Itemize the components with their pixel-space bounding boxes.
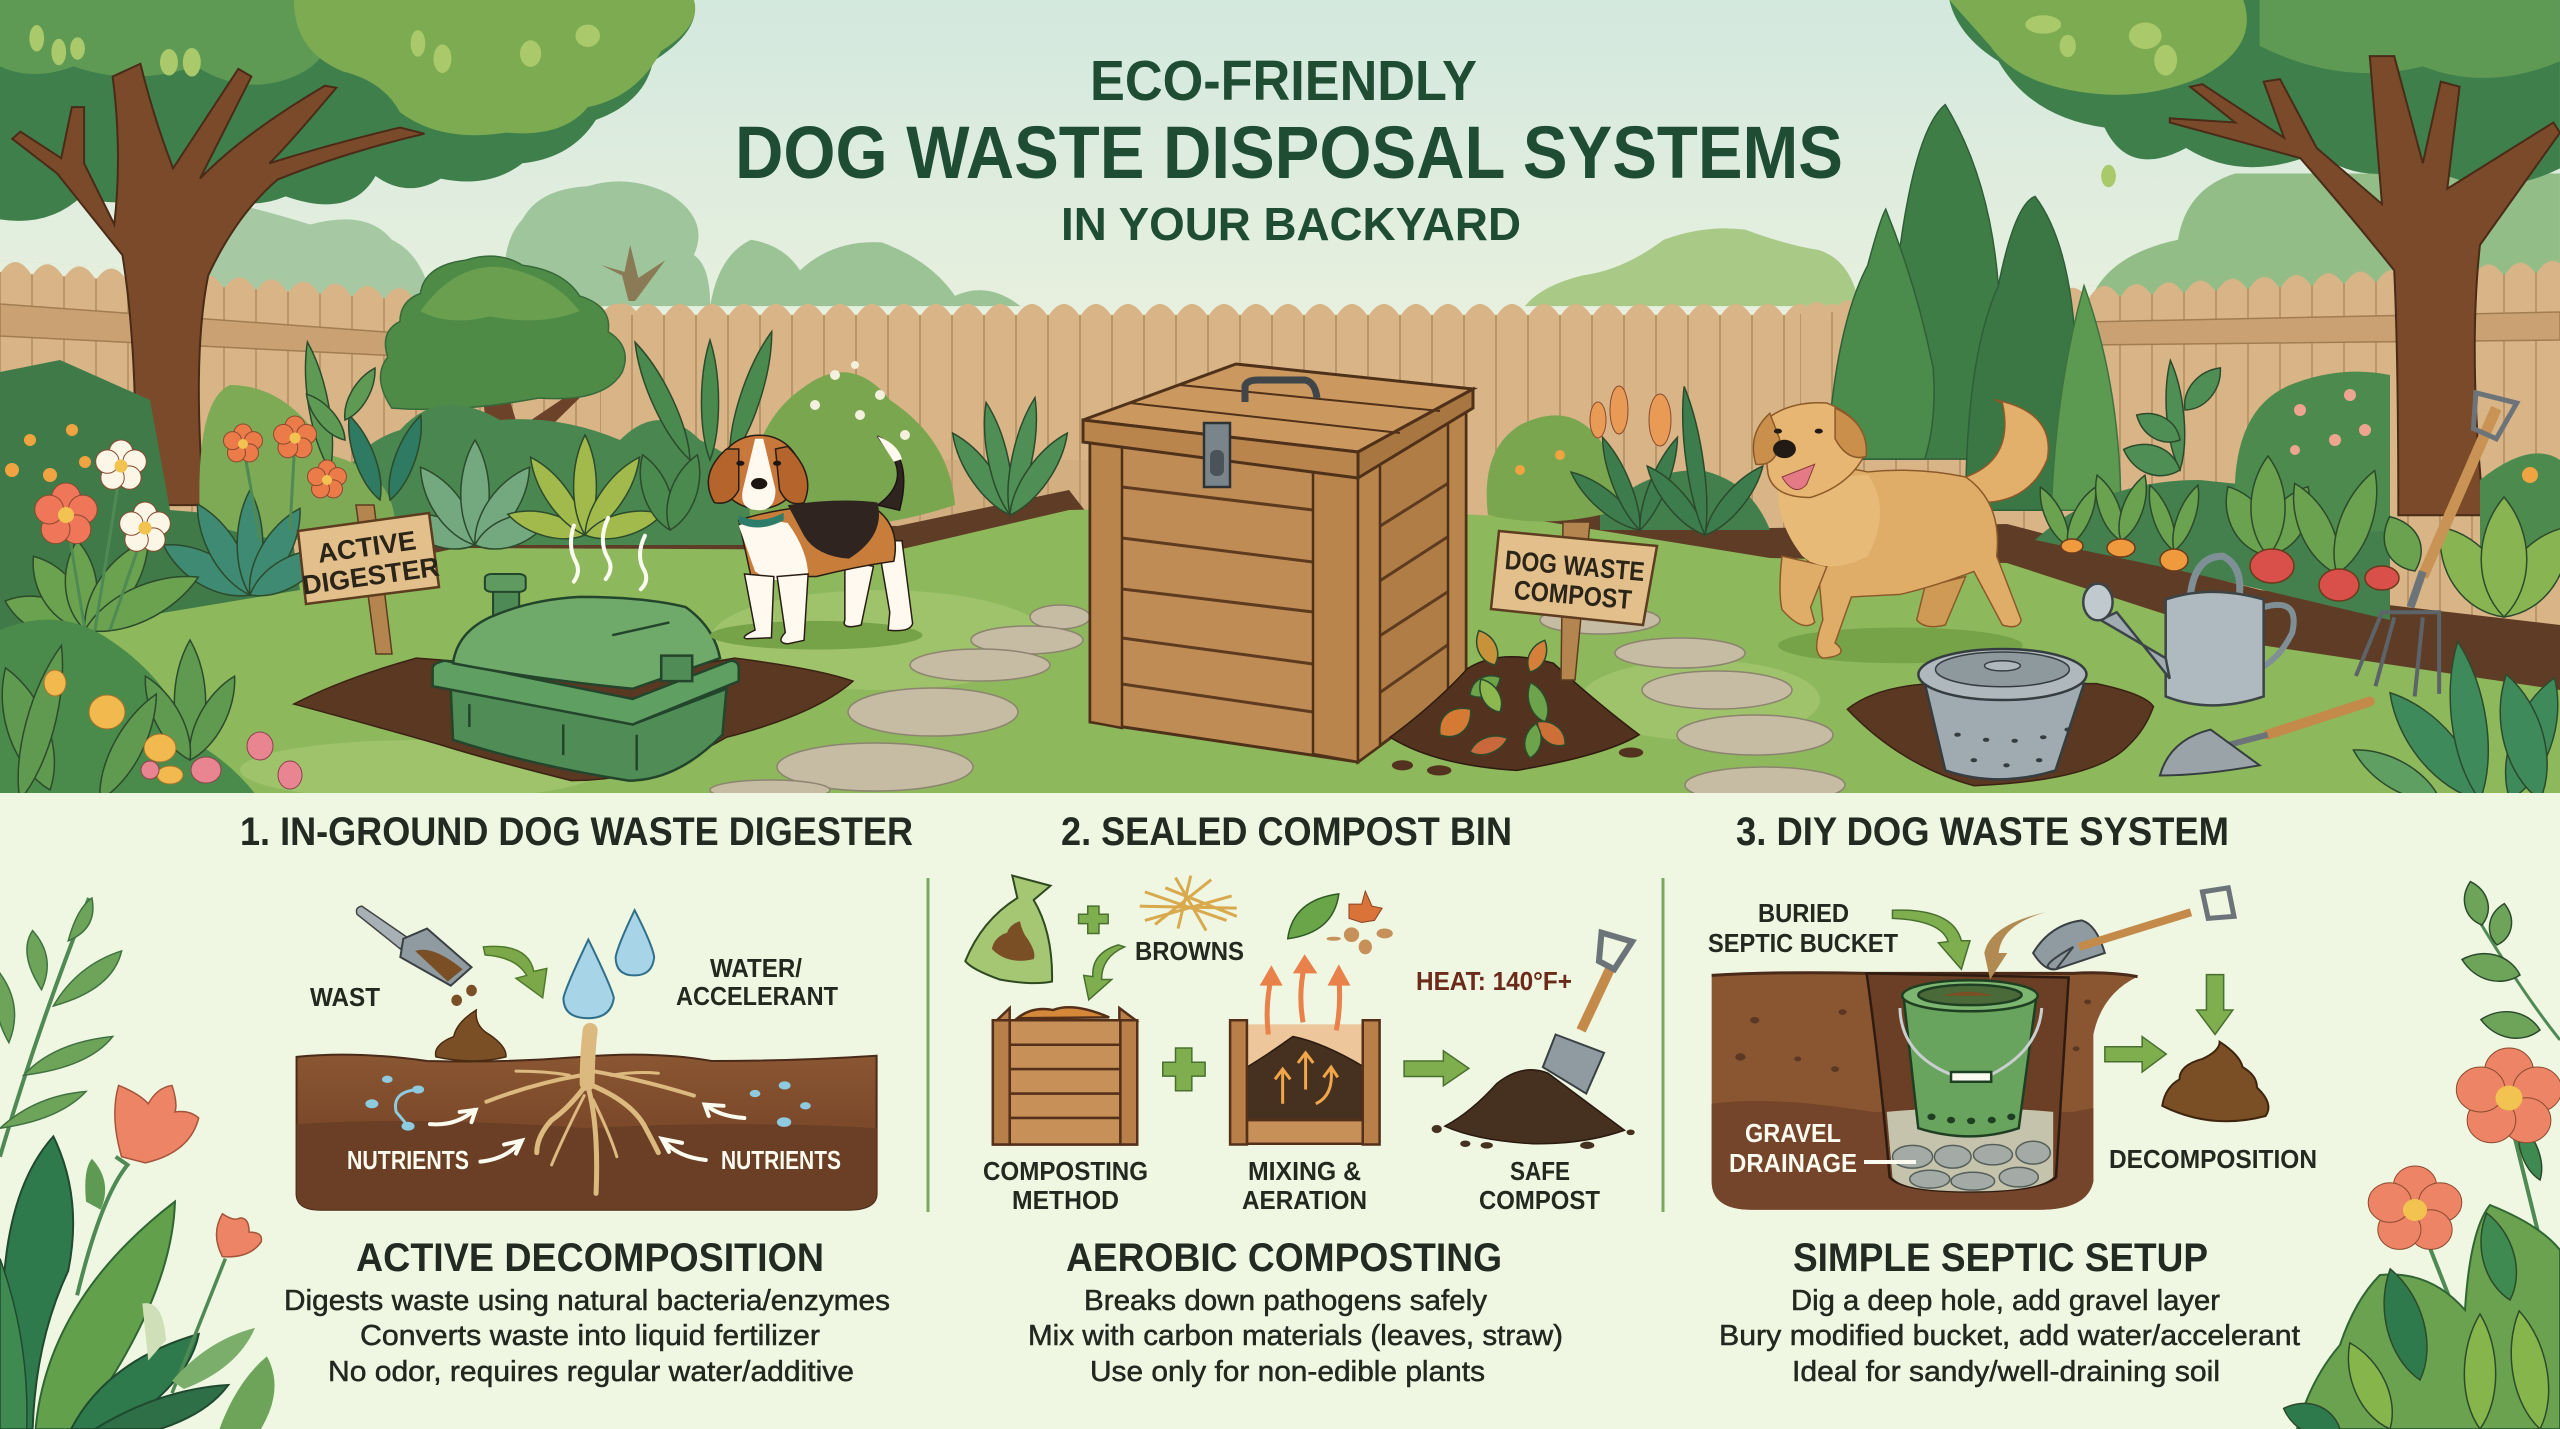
description 1: No odor, requires regular water/additive (328, 1356, 854, 1388)
label buried septic bucket: SEPTIC BUCKET (1708, 928, 1898, 958)
tulip flower (115, 1085, 199, 1163)
hole (1867, 973, 2069, 1191)
scattered leaves (1432, 627, 1571, 759)
sign: dog waste compost: DOG WASTE (1504, 545, 1646, 587)
round bush tree (380, 256, 625, 454)
beagle dog (708, 435, 922, 649)
label decomposition: DECOMPOSITION (2109, 1144, 2317, 1174)
background sky (0, 0, 2560, 793)
arrows into bucket (1892, 910, 2046, 979)
plus large (1163, 1048, 1205, 1091)
label gravel drainage (1729, 1118, 1916, 1178)
decorative plants panel right (2279, 879, 2560, 1429)
vent stem (485, 574, 526, 628)
label heat: HEAT: 140°F+ (1416, 966, 1572, 996)
section 1: digester (240, 810, 913, 1388)
arrow to safe compost (1404, 1051, 1469, 1086)
title line 2: DOG WASTE DISPOSAL SYSTEMS (735, 111, 1843, 194)
roots (486, 1030, 694, 1193)
lid (1083, 364, 1473, 478)
dense foliage base (0, 360, 2390, 640)
trunk (12, 64, 424, 505)
watering can (2083, 556, 2294, 705)
section 2: compost bin (965, 810, 1635, 1388)
description 2: Mix with carbon materials (leaves, straw) (1028, 1320, 1563, 1352)
leaves (1288, 891, 1393, 954)
right face (1358, 410, 1466, 762)
lid handle (1245, 380, 1317, 402)
compost pile with leaves (1390, 627, 1643, 776)
label safe compost: COMPOST (1479, 1185, 1600, 1215)
cypress trees (1827, 105, 2121, 510)
lower right foliage (2346, 639, 2560, 813)
garden plants right (1565, 360, 2560, 813)
section 3: diy system (1708, 810, 2317, 1388)
diagram: soil and roots (297, 1030, 877, 1210)
label water accelerant: WATER/ (710, 953, 802, 983)
septic bucket in the ground (1847, 649, 2153, 786)
title line 3: IN YOUR BACKYARD (1061, 198, 1521, 250)
description 1 (284, 1285, 890, 1388)
small tulip (216, 1214, 261, 1257)
label composting method: COMPOSTING (983, 1156, 1148, 1186)
sign: dog waste compost (1491, 522, 1657, 680)
label nutrients right: NUTRIENTS (721, 1145, 841, 1175)
label buried septic bucket (1708, 898, 1898, 958)
front face (1090, 440, 1358, 762)
compost bin (1083, 364, 1473, 762)
description 3: Dig a deep hole, add gravel layer (1791, 1285, 2220, 1317)
garden soil beds (0, 490, 2560, 800)
sign: active digester: ACTIVE (316, 525, 418, 569)
green bucket (1900, 980, 2042, 1136)
decorative plants panel left (0, 898, 275, 1429)
compost bin one (993, 1007, 1137, 1145)
description 1: Converts waste into liquid fertilizer (360, 1320, 820, 1352)
label composting method (983, 1156, 1148, 1215)
scoop with waste (356, 906, 477, 1006)
right tree (1949, 0, 2560, 515)
water drops (563, 910, 654, 1018)
straw browns (1140, 876, 1237, 931)
subheading 1: ACTIVE DECOMPOSITION (356, 1236, 824, 1280)
description 2: Use only for non-edible plants (1090, 1356, 1485, 1388)
distant trees right (1525, 173, 2560, 306)
wooden fence (0, 259, 2560, 704)
decomposing pile (2162, 1042, 2268, 1121)
description 2: Breaks down pathogens safely (1084, 1285, 1487, 1317)
orange flower large (2456, 1048, 2560, 1143)
information panel background (0, 793, 2560, 1429)
description 2 (1028, 1285, 1563, 1388)
green tank (433, 597, 739, 781)
sign: dog waste compost: COMPOST (1513, 575, 1633, 615)
label water accelerant: ACCELERANT (676, 981, 838, 1011)
lawn highlights (240, 590, 1820, 800)
stepping stones (710, 605, 1845, 803)
soil cross-section (1712, 973, 2138, 1210)
in-ground digester (294, 518, 853, 781)
sign: active digester: DIGESTER (300, 552, 441, 601)
heading 3: 3. DIY DOG WASTE SYSTEM (1736, 810, 2229, 854)
garden fork (2356, 393, 2517, 696)
plus small (1079, 906, 1108, 933)
canopy (0, 0, 695, 221)
poop pile (436, 1010, 506, 1061)
description 3 (1719, 1285, 2300, 1388)
arrow down (2197, 975, 2233, 1034)
subheading 3: SIMPLE SEPTIC SETUP (1793, 1236, 2208, 1280)
safe compost pile (1432, 1070, 1635, 1149)
label mixing aeration (1242, 1156, 1367, 1215)
gravel layer (1887, 1108, 2053, 1191)
hand trowel (2160, 702, 2370, 776)
description 3: Ideal for sandy/well-draining soil (1792, 1356, 2220, 1388)
lawn (0, 505, 2560, 800)
description 1: Digests waste using natural bacteria/enzymes (284, 1285, 890, 1317)
golden retriever (1753, 400, 2048, 663)
curved green arrow (483, 946, 547, 998)
dividers between systems (928, 878, 1663, 1212)
sign: active digester (298, 505, 441, 654)
label safe compost: SAFE (1510, 1156, 1570, 1186)
vegetables (2033, 456, 2560, 630)
flower stems (66, 438, 295, 630)
metal latch (1204, 423, 1230, 487)
subheading 2: AEROBIC COMPOSTING (1066, 1236, 1502, 1280)
foreground plants bottom left (0, 620, 302, 807)
label composting method: METHOD (1012, 1185, 1119, 1215)
label gravel drainage: DRAINAGE (1729, 1148, 1857, 1178)
canopy (1949, 0, 2560, 187)
arrow right (2105, 1037, 2166, 1072)
orange flower small (2368, 1166, 2462, 1249)
heading 1: 1. IN-GROUND DOG WASTE DIGESTER (240, 810, 913, 854)
trunk (2170, 56, 2560, 515)
steam wisps (571, 518, 646, 589)
shovel (1543, 933, 1632, 1094)
title line 1: ECO-FRIENDLY (1090, 49, 1477, 113)
label nutrients left: NUTRIENTS (347, 1145, 469, 1175)
label mixing aeration: MIXING & (1248, 1156, 1361, 1186)
label safe compost (1479, 1156, 1600, 1215)
water nodes (365, 1076, 811, 1131)
white arrows (430, 1105, 744, 1162)
left tree (0, 0, 695, 505)
soil block (297, 1055, 877, 1210)
label gravel drainage: GRAVEL (1745, 1118, 1841, 1148)
distant trees left (188, 181, 1020, 306)
label buried septic bucket: BURIED (1758, 898, 1849, 928)
description 3: Bury modified bucket, add water/accelerant (1719, 1320, 2300, 1352)
green arrow into bin (1084, 945, 1124, 1000)
label water accelerant (676, 953, 838, 1011)
waste bag (965, 876, 1052, 983)
compost bin two with heat (1230, 954, 1380, 1145)
digging shovel (2033, 888, 2234, 970)
label mixing aeration: AERATION (1242, 1185, 1367, 1215)
dug hole (294, 658, 853, 781)
garden plants left (0, 329, 1077, 646)
label waste: WAST (310, 982, 380, 1012)
posts (1090, 410, 1466, 762)
background bushes (5, 361, 2560, 560)
label browns: BROWNS (1135, 936, 1244, 966)
heading 2: 2. SEALED COMPOST BIN (1061, 810, 1512, 854)
flowers (35, 416, 347, 551)
title (735, 49, 1843, 250)
plank lines (1122, 472, 1466, 712)
